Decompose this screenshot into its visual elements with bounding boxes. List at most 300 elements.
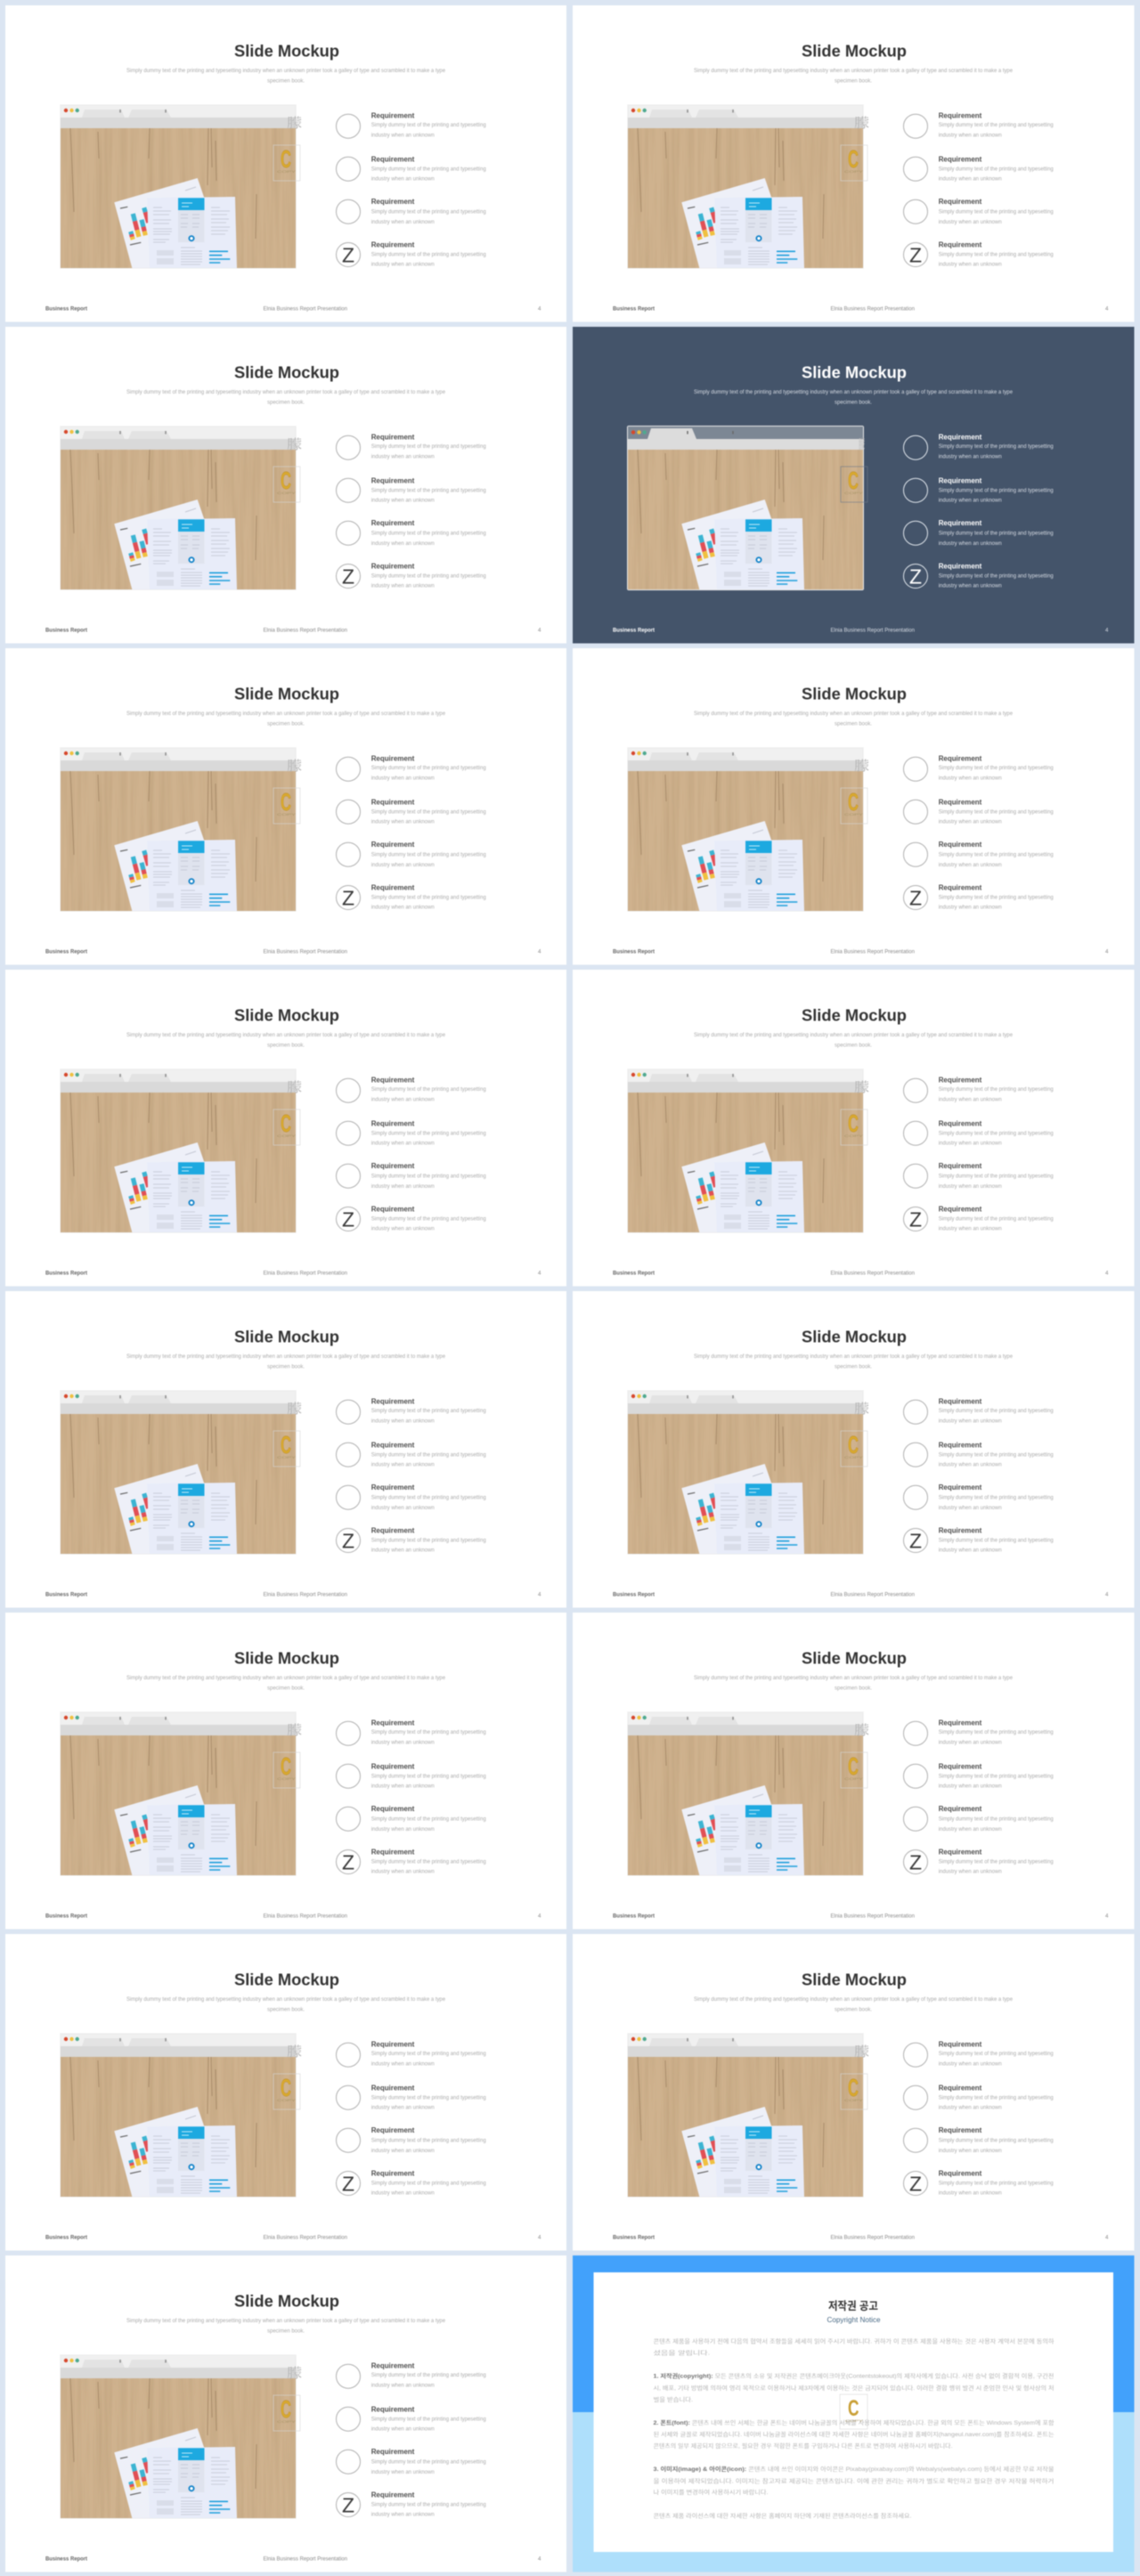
item 2: Simply dummy text of the printing and typesetting bbox=[371, 1131, 486, 1136]
item 4: Simply dummy text of the printing and typesetting bbox=[939, 2181, 1054, 2186]
item 4: Z bbox=[342, 2173, 354, 2196]
item 3: Simply dummy text of the printing and typesetting bbox=[371, 532, 486, 537]
intro paragraph bbox=[654, 2336, 1054, 2356]
item 1 bbox=[337, 754, 486, 782]
item 2: Requirement bbox=[371, 1762, 415, 1770]
requirement list bbox=[903, 1076, 1054, 1232]
item 4: Requirement bbox=[371, 562, 415, 570]
item 4: industry when an unknown bbox=[371, 1227, 435, 1232]
footer: 4 bbox=[1105, 1592, 1109, 1597]
footer: Business Report bbox=[45, 1913, 87, 1920]
browser mockup bbox=[627, 1069, 864, 1232]
item 2: Requirement bbox=[939, 1762, 982, 1770]
footer: Business Report bbox=[45, 949, 87, 955]
item 1 bbox=[337, 111, 486, 139]
item 4: Z bbox=[909, 565, 922, 588]
watermark: 朦 bbox=[287, 437, 302, 452]
clause 3 bbox=[654, 2465, 1054, 2496]
item 3: industry when an unknown bbox=[371, 2470, 435, 2475]
item 4: Simply dummy text of the printing and typesetting bbox=[939, 1859, 1054, 1865]
item 2: Requirement bbox=[371, 1441, 415, 1449]
requirement list bbox=[337, 433, 486, 589]
item 4: industry when an unknown bbox=[939, 2191, 1002, 2197]
slide: row 2 right dark bbox=[573, 327, 1135, 643]
item 4 bbox=[903, 883, 1054, 911]
footer bbox=[613, 2235, 1109, 2240]
item 3: Requirement bbox=[371, 1805, 415, 1813]
subtitle: Simply dummy text of the printing and typesetting industry when an unknown printer took a galley of type and scrambled it to make a type bbox=[694, 1997, 1014, 2003]
footer: Elnia Business Report Presentation bbox=[830, 949, 916, 955]
item 2: Simply dummy text of the printing and typesetting bbox=[939, 167, 1054, 172]
item 2: Requirement bbox=[939, 2084, 982, 2092]
watermark bbox=[840, 2394, 867, 2429]
item 2: industry when an unknown bbox=[371, 499, 435, 504]
item 4: Z bbox=[909, 244, 922, 267]
item 3: industry when an unknown bbox=[939, 2149, 1002, 2154]
subtitle: specimen book. bbox=[835, 401, 872, 406]
item 2: industry when an unknown bbox=[939, 820, 1002, 825]
item 3: industry when an unknown bbox=[939, 541, 1002, 547]
footer: Business Report bbox=[45, 2556, 87, 2563]
subtitle: Simply dummy text of the printing and typesetting industry when an unknown printer took a galley of type and scrambled it to make a type bbox=[126, 69, 446, 74]
item 3 bbox=[903, 1805, 1054, 1832]
item 3: Simply dummy text of the printing and typesetting bbox=[371, 2460, 486, 2466]
subtitle bbox=[126, 1676, 446, 1692]
footer: Elnia Business Report Presentation bbox=[264, 2556, 348, 2563]
item 4: industry when an unknown bbox=[939, 584, 1002, 589]
watermark: COPY bbox=[277, 2419, 297, 2424]
subtitle: Simply dummy text of the printing and typesetting industry when an unknown printer took a galley of type and scrambled it to make a type bbox=[126, 390, 446, 395]
item 1 bbox=[903, 2040, 1054, 2068]
slide: row 4 right bbox=[573, 970, 1135, 1286]
footer: 4 bbox=[1105, 949, 1109, 955]
requirement list bbox=[337, 1397, 486, 1554]
footer: Business Report bbox=[613, 1270, 655, 1277]
item 2 bbox=[337, 1441, 486, 1468]
item 2: Simply dummy text of the printing and typesetting bbox=[939, 809, 1054, 815]
slide: row 6 left bbox=[5, 1613, 566, 1929]
item 4 bbox=[337, 1526, 486, 1554]
item 4: Z bbox=[909, 1850, 922, 1873]
item 2: Simply dummy text of the printing and typesetting bbox=[371, 488, 486, 493]
watermark: 朦 bbox=[859, 437, 865, 452]
item 4: industry when an unknown bbox=[939, 1870, 1002, 1875]
item 1: Requirement bbox=[371, 754, 415, 762]
footer: Elnia Business Report Presentation bbox=[830, 1270, 916, 1277]
browser mockup bbox=[61, 2034, 296, 2198]
footer: 4 bbox=[538, 1913, 542, 1920]
item 4: Simply dummy text of the printing and typesetting bbox=[371, 252, 486, 257]
item 3 bbox=[903, 1483, 1054, 1511]
title: Slide Mockup bbox=[234, 1006, 339, 1024]
item 3: Simply dummy text of the printing and typesetting bbox=[371, 2139, 486, 2144]
footer bbox=[45, 1913, 542, 1920]
requirement list bbox=[337, 1076, 486, 1232]
requirement list bbox=[337, 2361, 486, 2518]
item 2: Simply dummy text of the printing and typesetting bbox=[939, 488, 1054, 493]
title: Slide Mockup bbox=[234, 2292, 339, 2310]
footer: Business Report bbox=[45, 1270, 87, 1277]
item 4 bbox=[903, 1848, 1054, 1875]
item 3 bbox=[337, 2448, 486, 2475]
item 2: industry when an unknown bbox=[939, 1142, 1002, 1147]
item 1: Requirement bbox=[371, 2361, 415, 2369]
subtitle: specimen book. bbox=[835, 78, 872, 84]
item 1: Requirement bbox=[939, 1076, 982, 1084]
slide: row 6 right bbox=[573, 1613, 1135, 1929]
browser mockup bbox=[627, 2034, 864, 2198]
item 3: Simply dummy text of the printing and typesetting bbox=[939, 2139, 1054, 2144]
subtitle: Simply dummy text of the printing and typesetting industry when an unknown printer took a galley of type and scrambled it to make a type bbox=[126, 1997, 446, 2003]
subtitle bbox=[126, 1997, 446, 2012]
item 2: Requirement bbox=[371, 155, 415, 163]
item 3: Simply dummy text of the printing and typesetting bbox=[939, 1174, 1054, 1180]
watermark: 朦 bbox=[287, 116, 302, 131]
item 3 bbox=[337, 198, 486, 225]
title: Slide Mockup bbox=[234, 1970, 339, 1989]
item 4: industry when an unknown bbox=[371, 1870, 435, 1875]
footer: Business Report bbox=[45, 627, 87, 634]
item 1: Requirement bbox=[939, 2040, 982, 2048]
item 4: Simply dummy text of the printing and typesetting bbox=[371, 573, 486, 579]
title: Slide Mockup bbox=[802, 41, 907, 61]
item 3: industry when an unknown bbox=[939, 220, 1002, 225]
subtitle bbox=[694, 1033, 1014, 1049]
subtitle: specimen book. bbox=[267, 78, 305, 84]
footer bbox=[613, 1592, 1109, 1597]
footer bbox=[613, 1270, 1109, 1277]
footer: Elnia Business Report Presentation bbox=[264, 1592, 348, 1597]
footer: 4 bbox=[1105, 2235, 1109, 2240]
item 1 bbox=[903, 1719, 1054, 1746]
item 3: Requirement bbox=[371, 1483, 415, 1491]
item 1 bbox=[903, 1397, 1054, 1425]
item 1 bbox=[337, 2361, 486, 2389]
item 2: industry when an unknown bbox=[371, 2427, 435, 2433]
subtitle: specimen book. bbox=[835, 1044, 872, 1049]
item 1: industry when an unknown bbox=[371, 776, 435, 782]
watermark: COPY bbox=[845, 2418, 864, 2423]
item 2: Requirement bbox=[371, 2405, 415, 2413]
item 2: industry when an unknown bbox=[371, 1784, 435, 1790]
title: Slide Mockup bbox=[802, 1649, 907, 1667]
item 1: industry when an unknown bbox=[371, 2384, 435, 2389]
item 3: Requirement bbox=[939, 519, 982, 527]
item 3 bbox=[903, 2126, 1054, 2154]
item 4 bbox=[337, 2169, 486, 2197]
subtitle: specimen book. bbox=[835, 1364, 872, 1369]
requirement list bbox=[903, 2040, 1054, 2197]
item 3: Requirement bbox=[939, 2126, 982, 2134]
item 3: industry when an unknown bbox=[371, 1184, 435, 1190]
watermark: 朦 bbox=[287, 2044, 302, 2060]
item 1: industry when an unknown bbox=[939, 455, 1002, 460]
title: Slide Mockup bbox=[802, 1006, 907, 1024]
item 3 bbox=[337, 841, 486, 868]
item 1: industry when an unknown bbox=[939, 776, 1002, 782]
item 1: Simply dummy text of the printing and typesetting bbox=[371, 766, 486, 771]
requirement list bbox=[903, 433, 1054, 589]
watermark: C bbox=[281, 2074, 291, 2101]
footer: 4 bbox=[1105, 627, 1109, 634]
item 4: industry when an unknown bbox=[939, 263, 1002, 268]
item 1: Simply dummy text of the printing and typesetting bbox=[371, 1730, 486, 1735]
footer: 4 bbox=[538, 306, 542, 312]
item 3: Simply dummy text of the printing and typesetting bbox=[939, 1496, 1054, 1501]
subtitle: specimen book. bbox=[267, 401, 305, 406]
item 1: Simply dummy text of the printing and typesetting bbox=[939, 1087, 1054, 1093]
watermark: 朦 bbox=[287, 759, 302, 774]
item 2: industry when an unknown bbox=[939, 2106, 1002, 2111]
watermark: COPY bbox=[277, 169, 297, 174]
item 1: Simply dummy text of the printing and typesetting bbox=[371, 1087, 486, 1093]
slide: row 1 left bbox=[5, 5, 566, 322]
item 4: Z bbox=[342, 2493, 354, 2516]
item 4 bbox=[337, 883, 486, 911]
item 2 bbox=[337, 1762, 486, 1790]
item 4: Requirement bbox=[939, 883, 982, 891]
footer: Elnia Business Report Presentation bbox=[830, 306, 916, 312]
watermark: C bbox=[848, 467, 859, 494]
subtitle: Simply dummy text of the printing and typesetting industry when an unknown printer took a galley of type and scrambled it to make a type bbox=[694, 711, 1014, 717]
item 4: Simply dummy text of the printing and typesetting bbox=[371, 2181, 486, 2186]
footer: 4 bbox=[538, 627, 542, 634]
subtitle bbox=[126, 2319, 446, 2335]
footer bbox=[45, 2556, 542, 2563]
watermark: 朦 bbox=[287, 1723, 302, 1738]
watermark: C bbox=[281, 1752, 291, 1780]
item 4: Simply dummy text of the printing and typesetting bbox=[371, 1859, 486, 1865]
item 2 bbox=[337, 2084, 486, 2111]
footer: Elnia Business Report Presentation bbox=[830, 627, 916, 634]
watermark: COPY bbox=[844, 1776, 864, 1781]
requirement list bbox=[337, 754, 486, 911]
title: Slide Mockup bbox=[802, 684, 907, 703]
item 1: industry when an unknown bbox=[371, 1419, 435, 1425]
watermark bbox=[841, 437, 867, 502]
item 2: Simply dummy text of the printing and typesetting bbox=[371, 2095, 486, 2101]
watermark: COPY bbox=[844, 2098, 864, 2102]
item 3: Simply dummy text of the printing and typesetting bbox=[939, 210, 1054, 215]
browser mockup bbox=[61, 105, 296, 269]
watermark bbox=[841, 759, 869, 824]
subtitle: Simply dummy text of the printing and typesetting industry when an unknown printer took a galley of type and scrambled it to make a type bbox=[694, 69, 1014, 74]
item 4: industry when an unknown bbox=[939, 906, 1002, 911]
item 3 bbox=[903, 519, 1054, 547]
watermark: 朦 bbox=[287, 1080, 302, 1095]
browser mockup bbox=[61, 1711, 296, 1875]
item 4: Z bbox=[909, 1530, 922, 1553]
watermark: 朦 bbox=[854, 116, 869, 131]
watermark: COPY bbox=[844, 169, 864, 174]
item 1: industry when an unknown bbox=[371, 1098, 435, 1103]
item 2 bbox=[903, 798, 1054, 825]
item 4 bbox=[337, 1205, 486, 1232]
browser mockup bbox=[61, 2354, 296, 2518]
item 3: Simply dummy text of the printing and typesetting bbox=[371, 1817, 486, 1823]
item 4: Requirement bbox=[371, 1848, 415, 1856]
item 4 bbox=[337, 240, 486, 268]
item 1: Simply dummy text of the printing and typesetting bbox=[939, 123, 1054, 128]
item 4: Simply dummy text of the printing and typesetting bbox=[939, 1216, 1054, 1222]
item 2: Simply dummy text of the printing and typesetting bbox=[939, 2095, 1054, 2101]
watermark bbox=[841, 116, 869, 181]
item 4: Simply dummy text of the printing and typesetting bbox=[939, 252, 1054, 257]
item 4: Requirement bbox=[371, 1205, 415, 1213]
requirement list bbox=[903, 1397, 1054, 1554]
footer: 4 bbox=[538, 1270, 542, 1277]
item 4: Z bbox=[909, 1207, 922, 1231]
footer: 4 bbox=[538, 949, 542, 955]
item 2 bbox=[337, 2405, 486, 2433]
item 2: Requirement bbox=[371, 798, 415, 806]
watermark: C bbox=[281, 467, 291, 494]
requirement list bbox=[903, 111, 1054, 268]
footer: Elnia Business Report Presentation bbox=[830, 1592, 916, 1597]
watermark: COPY bbox=[844, 1134, 864, 1138]
slide: row 7 left bbox=[5, 1934, 566, 2251]
subtitle bbox=[126, 1033, 446, 1049]
watermark: C bbox=[281, 1109, 291, 1137]
item 2: Requirement bbox=[939, 476, 982, 484]
intro paragraph: 셨음을 알립니다. bbox=[654, 2349, 711, 2356]
item 1: industry when an unknown bbox=[939, 1419, 1002, 1425]
subtitle: Simply dummy text of the printing and typesetting industry when an unknown printer took a galley of type and scrambled it to make a type bbox=[694, 1354, 1014, 1360]
item 2 bbox=[337, 155, 486, 183]
item 3: industry when an unknown bbox=[371, 2149, 435, 2154]
item 1: Simply dummy text of the printing and typesetting bbox=[371, 2052, 486, 2057]
footer: Elnia Business Report Presentation bbox=[264, 1913, 348, 1920]
requirement list bbox=[903, 754, 1054, 911]
item 3 bbox=[337, 519, 486, 547]
watermark bbox=[273, 116, 302, 181]
slide: row 1 right bbox=[573, 5, 1135, 322]
subtitle: specimen book. bbox=[267, 1044, 305, 1049]
title: Slide Mockup bbox=[234, 1649, 339, 1667]
item 1: Requirement bbox=[939, 111, 982, 119]
item 3: Simply dummy text of the printing and typesetting bbox=[939, 1817, 1054, 1823]
slide: row 5 right bbox=[573, 1291, 1135, 1608]
browser mockup bbox=[627, 426, 864, 590]
item 4: Requirement bbox=[939, 1848, 982, 1856]
footer bbox=[45, 1592, 542, 1597]
item 4: Requirement bbox=[371, 2491, 415, 2499]
subtitle: Simply dummy text of the printing and typesetting industry when an unknown printer took a galley of type and scrambled it to make a type bbox=[694, 1033, 1014, 1038]
footer: Elnia Business Report Presentation bbox=[264, 949, 348, 955]
item 2: industry when an unknown bbox=[371, 1142, 435, 1147]
item 3 bbox=[903, 1162, 1054, 1190]
item 3: Simply dummy text of the printing and typesetting bbox=[371, 853, 486, 858]
item 1: Simply dummy text of the printing and typesetting bbox=[371, 2373, 486, 2378]
item 4: Z bbox=[342, 244, 354, 267]
item 1 bbox=[903, 754, 1054, 782]
item 3: Requirement bbox=[371, 519, 415, 527]
watermark bbox=[841, 2044, 869, 2109]
watermark bbox=[273, 759, 302, 824]
footer bbox=[45, 306, 542, 312]
watermark: COPY bbox=[277, 2098, 297, 2102]
footer bbox=[45, 1270, 542, 1277]
footer: Business Report bbox=[45, 1592, 87, 1597]
item 2 bbox=[903, 155, 1054, 183]
item 4: Z bbox=[342, 1530, 354, 1553]
slide: row 3 left bbox=[5, 648, 566, 965]
footer: 4 bbox=[538, 1592, 542, 1597]
clause 3: 나 이미지를 변경하여 사용하시기 바랍니다. bbox=[654, 2488, 769, 2496]
item 1: Simply dummy text of the printing and typesetting bbox=[371, 1409, 486, 1414]
item 4: industry when an unknown bbox=[939, 1227, 1002, 1232]
watermark: 朦 bbox=[854, 1080, 869, 1095]
item 1: Requirement bbox=[939, 1397, 982, 1405]
item 2: Requirement bbox=[371, 476, 415, 484]
watermark: 朦 bbox=[854, 759, 869, 774]
footer: 4 bbox=[1105, 1913, 1109, 1920]
footer: Elnia Business Report Presentation bbox=[264, 2235, 348, 2240]
subtitle: Simply dummy text of the printing and typesetting industry when an unknown printer took a galley of type and scrambled it to make a type bbox=[126, 1676, 446, 1681]
browser mockup bbox=[61, 426, 296, 589]
item 2: Simply dummy text of the printing and typesetting bbox=[371, 2417, 486, 2422]
footer: 4 bbox=[538, 2556, 542, 2563]
item 4: Z bbox=[342, 887, 354, 910]
title: Slide Mockup bbox=[234, 684, 339, 703]
item 1: Simply dummy text of the printing and typesetting bbox=[371, 123, 486, 128]
item 2: Simply dummy text of the printing and typesetting bbox=[371, 1774, 486, 1779]
item 1: industry when an unknown bbox=[371, 455, 435, 460]
clause 2 bbox=[654, 2418, 1054, 2450]
item 4: Z bbox=[342, 1207, 354, 1231]
item 2 bbox=[903, 2084, 1054, 2111]
watermark: 朦 bbox=[287, 1402, 302, 1417]
item 3 bbox=[337, 2126, 486, 2154]
footer bbox=[613, 1913, 1109, 1920]
subtitle bbox=[694, 1676, 1014, 1692]
item 1: Requirement bbox=[939, 1719, 982, 1727]
item 4 bbox=[903, 1205, 1054, 1232]
watermark: COPY bbox=[277, 1455, 297, 1459]
footer bbox=[45, 627, 542, 634]
item 4: industry when an unknown bbox=[371, 906, 435, 911]
subtitle: specimen book. bbox=[267, 2007, 305, 2012]
item 3 bbox=[903, 198, 1054, 225]
item 3 bbox=[337, 1483, 486, 1511]
item 1 bbox=[337, 1076, 486, 1103]
copyright subheading: Copyright Notice bbox=[826, 2316, 881, 2324]
item 1 bbox=[337, 1719, 486, 1746]
item 2: industry when an unknown bbox=[371, 820, 435, 825]
item 2: Simply dummy text of the printing and typesetting bbox=[939, 1774, 1054, 1779]
item 4 bbox=[903, 562, 1054, 589]
clause 2: 된 서체와 글꼴로 제작되었습니다. 네이버 나눔글꼴 라이선스에 대한 자세한 사항은 네이버 나눔글꼴 홈페이지(hangeul.naver.com)를 참조하세요. 폰트는 bbox=[654, 2430, 1054, 2438]
watermark bbox=[841, 1402, 869, 1467]
item 4: Simply dummy text of the printing and typesetting bbox=[371, 1538, 486, 1543]
item 1 bbox=[337, 433, 486, 460]
watermark: C bbox=[281, 145, 291, 173]
item 4 bbox=[337, 1848, 486, 1875]
item 1: Requirement bbox=[939, 754, 982, 762]
subtitle bbox=[126, 1354, 446, 1369]
item 2: Requirement bbox=[371, 2084, 415, 2092]
item 4: industry when an unknown bbox=[371, 1548, 435, 1554]
item 4: Simply dummy text of the printing and typesetting bbox=[939, 1538, 1054, 1543]
item 1: Simply dummy text of the printing and typesetting bbox=[939, 2052, 1054, 2057]
item 3: industry when an unknown bbox=[371, 220, 435, 225]
item 3: Simply dummy text of the printing and typesetting bbox=[939, 853, 1054, 858]
copyright heading: 저작권 공고 bbox=[828, 2299, 878, 2312]
item 1 bbox=[903, 433, 1054, 460]
footer: Business Report bbox=[45, 306, 87, 312]
watermark: 朦 bbox=[854, 1402, 869, 1417]
item 1: Requirement bbox=[371, 1076, 415, 1084]
